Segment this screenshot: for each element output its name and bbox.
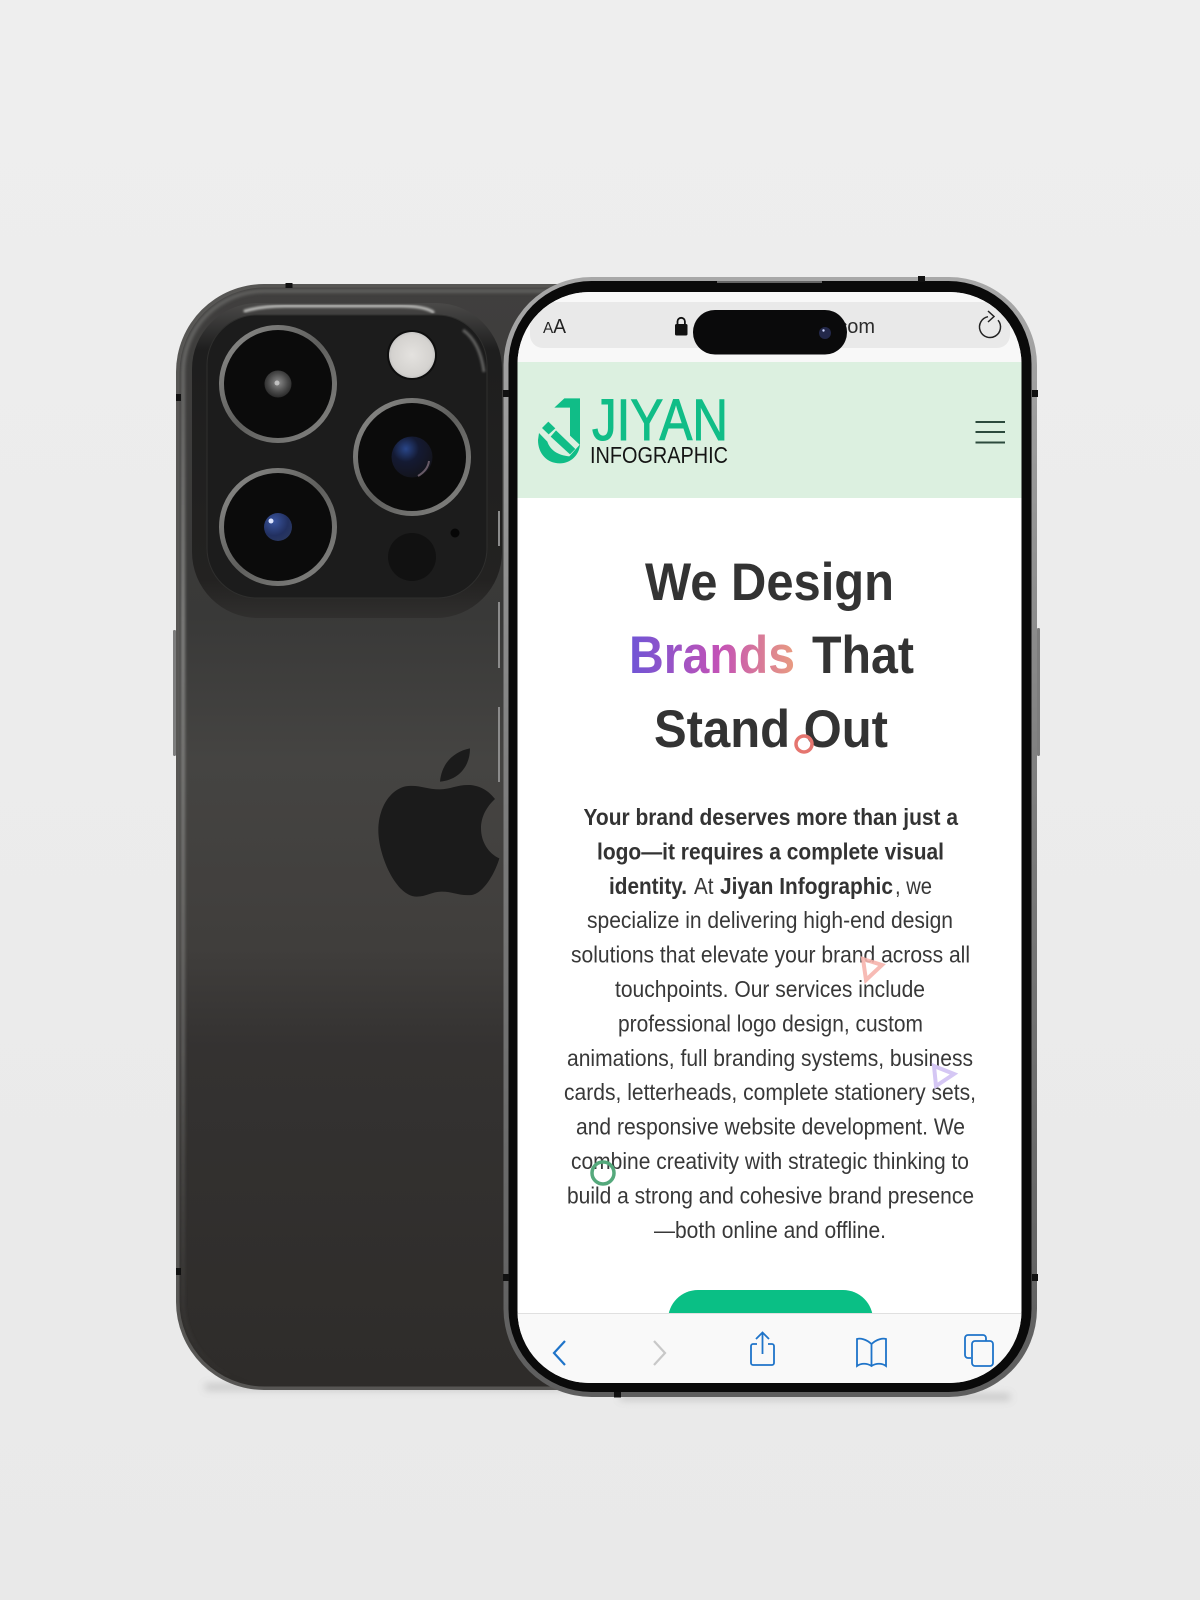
body paragraph: professional logo design, custom xyxy=(618,1010,923,1036)
hamburger menu xyxy=(976,422,1005,442)
headline: Stand Out xyxy=(654,700,888,759)
logo xyxy=(538,398,728,464)
lens: ultra wide xyxy=(222,328,334,440)
body paragraph: identity. xyxy=(609,873,687,899)
camera bump xyxy=(192,303,502,618)
logo mark xyxy=(538,398,580,463)
share icon xyxy=(751,1332,774,1365)
body paragraph: combine creativity with strategic thinking to xyxy=(571,1148,969,1174)
body paragraph xyxy=(564,804,976,1243)
body paragraph: cards, letterheads, complete stationery sets, xyxy=(564,1079,976,1105)
body paragraph: , we xyxy=(895,873,932,899)
ground shadow xyxy=(205,1384,1010,1400)
site header band xyxy=(517,362,1022,498)
back phone body xyxy=(176,284,696,1390)
decorative shapes xyxy=(592,736,954,1184)
lens: main xyxy=(222,470,334,584)
body paragraph: Jiyan Infographic xyxy=(720,873,893,899)
microphone xyxy=(450,528,460,538)
gradient word: Brands xyxy=(629,626,795,685)
lens: telephoto xyxy=(356,400,468,514)
headline: We Design xyxy=(645,553,894,612)
body paragraph: animations, full branding systems, business xyxy=(567,1045,973,1071)
front phone frame xyxy=(504,277,1037,1397)
url text: .com xyxy=(832,316,875,338)
tabs icon xyxy=(965,1335,993,1366)
call to action button xyxy=(668,1290,872,1313)
side button xyxy=(1037,628,1040,756)
text size control: AA xyxy=(543,316,567,338)
back icon xyxy=(554,1341,565,1365)
apple logo xyxy=(378,748,499,897)
bookmarks icon xyxy=(857,1339,886,1366)
logo wordmark: JIYAN xyxy=(592,388,728,453)
headline: That xyxy=(812,626,914,685)
back phone xyxy=(173,283,696,1390)
body paragraph: —both online and offline. xyxy=(654,1217,886,1243)
flash xyxy=(387,330,437,380)
body paragraph: and responsive website development. We xyxy=(576,1114,965,1140)
dynamic island xyxy=(693,310,847,354)
frame antenna ticks xyxy=(503,276,1038,1398)
browser address bar area xyxy=(517,292,1022,362)
reload icon xyxy=(980,311,1001,338)
body paragraph: Your brand deserves more than just a xyxy=(584,804,958,830)
body paragraph: build a strong and cohesive brand presence xyxy=(567,1182,974,1208)
body paragraph: solutions that elevate your brand across all xyxy=(571,942,970,968)
frame antenna ticks xyxy=(176,283,292,1275)
body paragraph: At xyxy=(694,873,714,899)
forward icon xyxy=(654,1341,665,1365)
logo subtitle: INFOGRAPHIC xyxy=(590,442,728,468)
volume buttons xyxy=(498,511,500,782)
browser toolbar xyxy=(517,1313,1022,1385)
body paragraph: specialize in delivering high-end design xyxy=(587,907,953,933)
body paragraph: logo—it requires a complete visual xyxy=(597,838,944,864)
back phone edge highlight xyxy=(183,291,689,1383)
headline xyxy=(632,562,914,748)
screen xyxy=(517,292,1022,1385)
lock icon xyxy=(675,318,688,336)
front phone xyxy=(503,276,1040,1398)
body paragraph: touchpoints. Our services include xyxy=(615,976,925,1002)
side button xyxy=(173,630,176,756)
lidar xyxy=(388,533,436,581)
